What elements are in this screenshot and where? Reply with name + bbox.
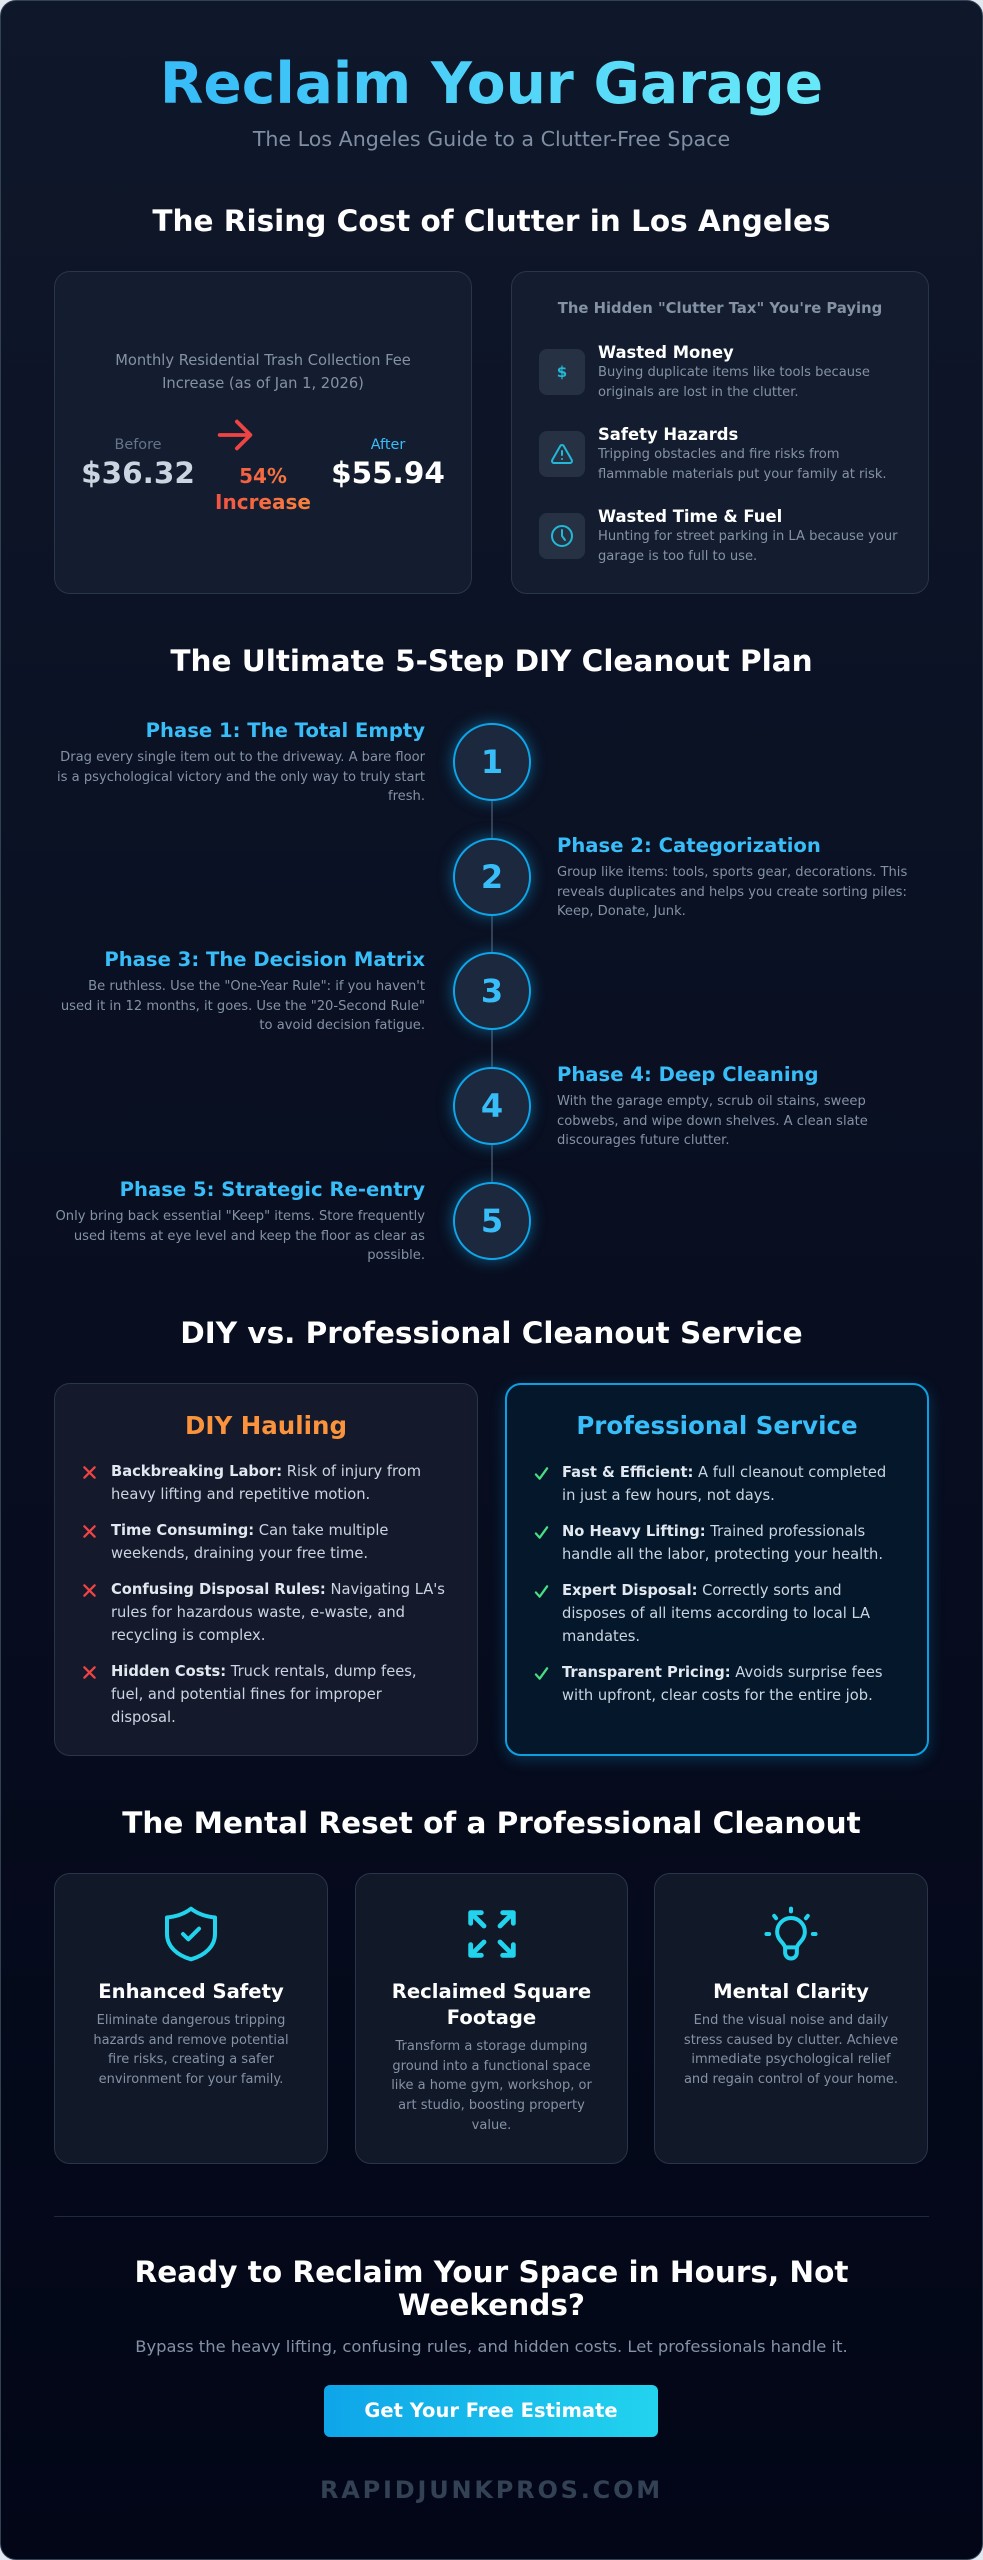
subtitle: The Los Angeles Guide to a Clutter-Free Space [253, 127, 730, 151]
drawback: rules: Confusing Disposal Rules: Navigating LA's [111, 1581, 445, 1598]
step 5 text: used items at eye level and keep the floor as clear as [74, 1229, 425, 1244]
description: value. [472, 2118, 511, 2133]
step 3 text [61, 948, 425, 1033]
description: fire risks, creating a safer [108, 2052, 274, 2067]
drawback: costs: Hidden Costs: Truck rentals, dump fees, [111, 1663, 417, 1680]
panel: enhanced safety [54, 1873, 328, 2164]
step 3 text: to avoid decision fatigue. [259, 1018, 425, 1033]
item: wasted time: Wasted Time & Fuel [598, 507, 782, 526]
panel heading: The Hidden "Clutter Tax" You're Paying [558, 300, 882, 317]
percent increase [184, 463, 342, 515]
description: ground into a functional space [392, 2059, 591, 2074]
panel: mental clarity [654, 1873, 928, 2164]
description [684, 2013, 898, 2087]
drawback: costs: disposal. [111, 1709, 176, 1726]
safety hazards text [598, 447, 887, 482]
after value [331, 437, 445, 490]
step 1 text: is a psychological victory and the only way to truly start [57, 770, 425, 785]
check mark [534, 1526, 548, 1539]
title: Reclaimed Square [392, 1980, 591, 2003]
panel: DIY hauling [54, 1383, 478, 1756]
icon: warning [539, 431, 585, 477]
wasted time text: garage is too full to use. [598, 549, 757, 564]
drawback: time: weekends, draining your free time. [111, 1545, 368, 1562]
step 3 text: used it in 12 months, it goes. Use the "20-Second Rule" [61, 999, 425, 1014]
benefit: no lifting [562, 1523, 883, 1563]
step 1 text: Phase 1: The Total Empty [146, 719, 425, 742]
panel: reclaimed square footage [355, 1873, 628, 2164]
footer brand: RAPIDJUNKPROS.COM [320, 2476, 663, 2504]
before value: Before [114, 437, 162, 453]
drawback: costs: fuel, and potential fines for improper [111, 1686, 382, 1703]
timeline [56, 714, 907, 1269]
title: Footage [447, 2006, 536, 2029]
x mark [83, 1466, 96, 1479]
step 3 text: Phase 3: The Decision Matrix [104, 948, 425, 971]
step 2 text: reveals duplicates and helps you create sorting piles: [557, 885, 907, 900]
step 2 text: Group like items: tools, sports gear, decorations. This [557, 865, 907, 880]
description: hazards and remove potential [93, 2033, 289, 2048]
icon: light bulb [764, 1906, 818, 1960]
description: End the visual noise and daily [694, 2013, 888, 2028]
before value [81, 437, 195, 490]
safety hazards text: flammable materials put your family at risk. [598, 467, 887, 482]
step 2 text [557, 834, 907, 919]
step 4 text [557, 1063, 868, 1148]
fee description [115, 352, 411, 392]
call to action heading: Weekends? [398, 2288, 585, 2322]
benefit: pricing [562, 1664, 883, 1704]
step 4 text: cobwebs, and wipe down shelves. A clean slate [557, 1114, 868, 1129]
step 4 circle [453, 1067, 531, 1145]
benefit: fast: Fast & Efficient: A full cleanout completed [562, 1464, 886, 1481]
description: and regain control of your home. [684, 2072, 898, 2087]
icon: shield [165, 1906, 217, 1962]
benefit: no lifting: handle all the labor, protecting your health. [562, 1546, 883, 1563]
step 2 text: Keep, Donate, Junk. [557, 904, 686, 919]
step 5 text: Only bring back essential "Keep" items. Store frequently [56, 1209, 425, 1224]
benefit: fast [562, 1464, 886, 1504]
DIY heading: DIY Hauling [185, 1411, 347, 1440]
step 2 circle: 2 [481, 858, 503, 896]
call to action text: Bypass the heavy lifting, confusing rules, and hidden costs. Let professionals handle it. [135, 2337, 848, 2356]
benefit: disposal: mandates. [562, 1628, 640, 1645]
heading: comparison: DIY vs. Professional Cleanout Service [180, 1316, 803, 1350]
icon: red arrow [218, 420, 252, 450]
step 2 text: Phase 2: Categorization [557, 834, 821, 857]
drawback: rules [111, 1581, 445, 1644]
step 5 text [56, 1178, 425, 1263]
drawback: rules: recycling is complex. [111, 1627, 265, 1644]
benefit: disposal [562, 1582, 870, 1645]
benefit: disposal: disposes of all items according to local LA [562, 1605, 870, 1622]
description [93, 2013, 289, 2087]
benefit: pricing: with upfront, clear costs for the entire job. [562, 1687, 873, 1704]
icon: dollar [539, 349, 585, 395]
drawback: labor [111, 1463, 421, 1503]
benefit: pricing: Transparent Pricing: Avoids surprise fees [562, 1664, 883, 1681]
title: Reclaim Your Garage [160, 51, 823, 117]
button [324, 2385, 658, 2437]
heading: rising cost: The Rising Cost of Clutter in Los Angeles [152, 204, 831, 238]
button: Get Your Free Estimate [364, 2399, 618, 2422]
panel: trash fee increase [54, 271, 472, 594]
drawback: time: Time Consuming: Can take multiple [111, 1522, 388, 1539]
divider [54, 2216, 929, 2217]
drawback: costs [111, 1663, 417, 1726]
step 5 circle: 5 [481, 1202, 503, 1240]
wasted time text: Hunting for street parking in LA because your [598, 529, 898, 544]
x mark [83, 1666, 96, 1679]
panel: professional service [505, 1383, 929, 1756]
description: stress caused by clutter. Achieve [684, 2033, 898, 2048]
step 5 text: Phase 5: Strategic Re-entry [120, 1178, 425, 1201]
icon: clock [539, 513, 585, 559]
safety hazards text: Tripping obstacles and fire risks from [598, 447, 840, 462]
step 5 text: possible. [367, 1248, 425, 1263]
step 1 circle [453, 723, 531, 801]
step 1 circle: 1 [481, 743, 503, 781]
title [392, 1980, 591, 2029]
step 3 circle: 3 [481, 972, 503, 1010]
x mark [83, 1525, 96, 1538]
after value: $55.94 [331, 456, 445, 490]
professional heading: Professional Service [576, 1411, 858, 1440]
drawback: labor: Backbreaking Labor: Risk of injury from [111, 1463, 421, 1480]
percent increase: 54% [239, 464, 287, 488]
heading: mental reset: The Mental Reset of a Professional Cleanout [122, 1806, 861, 1840]
percent increase: Increase [215, 490, 311, 514]
wasted money text [598, 365, 870, 400]
title: Enhanced Safety [98, 1980, 284, 2003]
description [391, 2039, 592, 2133]
step 5 circle [453, 1182, 531, 1260]
drawback: labor: heavy lifting and repetitive motion. [111, 1486, 370, 1503]
step 1 text [57, 719, 425, 804]
title: Mental Clarity [713, 1980, 869, 2003]
step 1 text: fresh. [388, 789, 425, 804]
benefit: fast: in just a few hours, not days. [562, 1487, 775, 1504]
fee description: Increase (as of Jan 1, 2026) [162, 375, 364, 392]
benefit: disposal: Expert Disposal: Correctly sorts and [562, 1582, 842, 1599]
description: art studio, boosting property [398, 2098, 585, 2113]
description: Transform a storage dumping [396, 2039, 587, 2054]
call to action heading: Ready to Reclaim Your Space in Hours, Not [134, 2255, 848, 2289]
description: Eliminate dangerous tripping [97, 2013, 285, 2028]
item: safety hazards: Safety Hazards [598, 425, 738, 444]
timeline connector [491, 725, 493, 1205]
benefit: no lifting: No Heavy Lifting: Trained professionals [562, 1523, 865, 1540]
fee description: Monthly Residential Trash Collection Fee [115, 352, 411, 369]
wasted money text: Buying duplicate items like tools because [598, 365, 870, 380]
description: immediate psychological relief [691, 2052, 891, 2067]
panel: hidden clutter tax [511, 271, 929, 594]
item: wasted money: Wasted Money [598, 343, 734, 362]
heading: 5-step plan: The Ultimate 5-Step DIY Cleanout Plan [170, 644, 813, 678]
check mark [534, 1467, 548, 1480]
drawback: time [111, 1522, 388, 1562]
check mark [534, 1667, 548, 1680]
step 4 circle: 4 [481, 1087, 503, 1125]
after value: After [371, 437, 405, 453]
call to action heading [134, 2255, 848, 2322]
x mark [83, 1584, 96, 1597]
step 3 circle [453, 952, 531, 1030]
step 4 text: With the garage empty, scrub oil stains, sweep [557, 1094, 866, 1109]
step 4 text: discourages future clutter. [557, 1133, 730, 1148]
wasted money text: originals are lost in the clutter. [598, 385, 799, 400]
step 2 circle [453, 838, 531, 916]
icon: dollar: $ [557, 363, 567, 381]
title [1, 46, 982, 122]
description: environment for your family. [99, 2072, 283, 2087]
drawback: rules: rules for hazardous waste, e-waste, and [111, 1604, 405, 1621]
before value: $36.32 [81, 456, 195, 490]
step 1 text: Drag every single item out to the driveway. A bare floor [60, 750, 425, 765]
icon: expand arrows [468, 1910, 516, 1958]
step 3 text: Be ruthless. Use the "One-Year Rule": if you haven't [88, 979, 425, 994]
description: like a home gym, workshop, or [391, 2078, 592, 2093]
check mark [534, 1585, 548, 1598]
wasted time text [598, 529, 898, 564]
step 4 text: Phase 4: Deep Cleaning [557, 1063, 819, 1086]
